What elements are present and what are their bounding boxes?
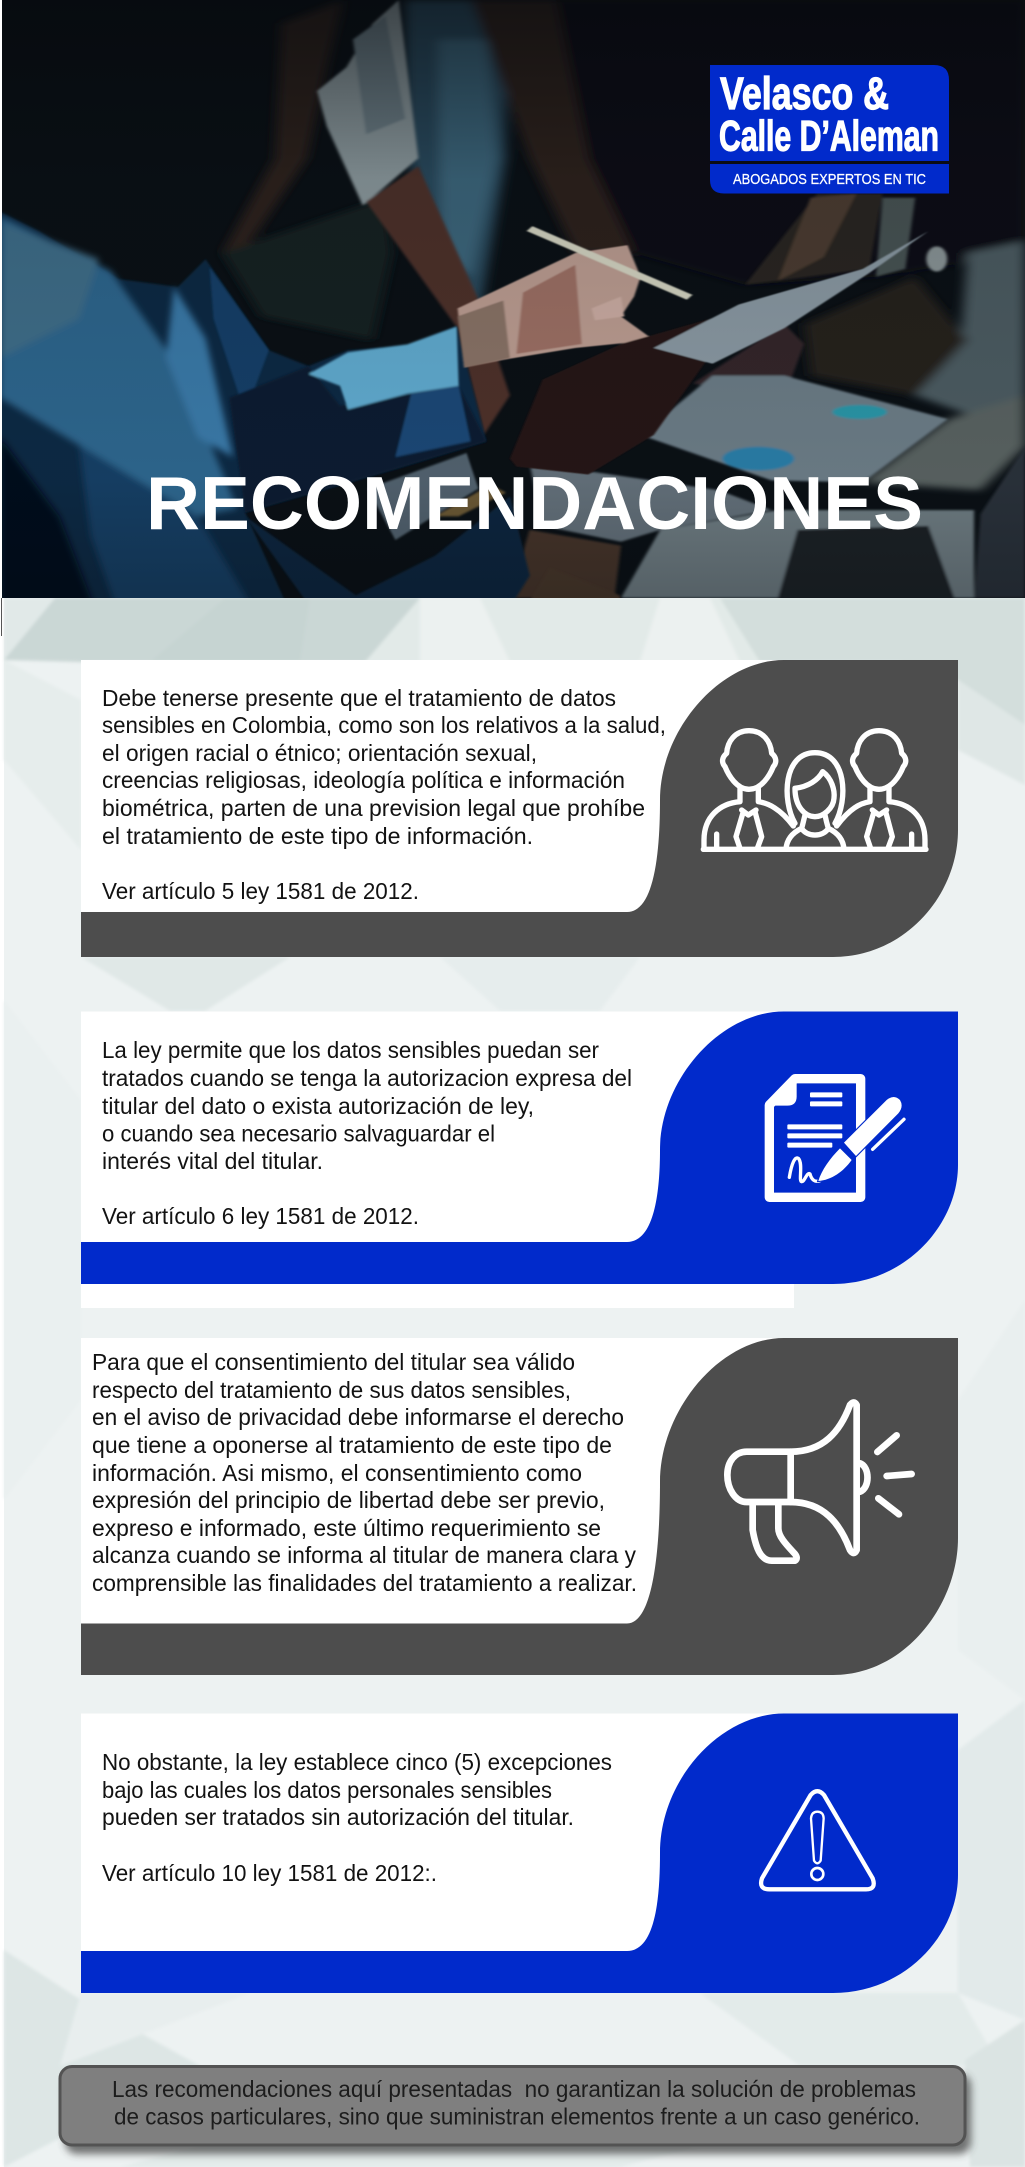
card 3 text: Para que el consentimiento del titular sea válido: [92, 1349, 575, 1375]
card 1 text: [102, 685, 666, 904]
panel: consent card: [81, 1338, 958, 1675]
icon: signed document: [769, 1079, 904, 1197]
card 1 text: creencias religiosas, ideología política e información: [102, 767, 625, 793]
panel: legal authorization card: [81, 1012, 958, 1308]
footer disclaimer: Las recomendaciones aquí presentadas no garantizan la solución de problemas: [112, 2076, 916, 2102]
card 1 text: el tratamiento de este tipo de información.: [102, 823, 533, 849]
card 1 text: biométrica, parten de una prevision legal que prohíbe: [102, 795, 645, 821]
hero: shirt and sleeve: [2, 212, 620, 598]
hero photo: [2, 0, 1025, 598]
card 3 text: información. Asi mismo, el consentimiento como: [92, 1460, 582, 1486]
icon: megaphone: [727, 1402, 912, 1561]
icon: group of people: [703, 731, 926, 849]
icon: warning triangle: [761, 1791, 874, 1889]
card 3 text: expreso e informado, este último requerimiento se: [92, 1515, 601, 1541]
panel: exceptions card: [81, 1714, 958, 1993]
title: RECOMENDACIONES: [146, 461, 923, 545]
card 1 text: Debe tenerse presente que el tratamiento de datos: [102, 685, 616, 711]
card 2 text: Ver artículo 6 ley 1581 de 2012.: [102, 1203, 419, 1229]
card 3 text: que tiene a oponerse al tratamiento de este tipo de: [92, 1432, 612, 1458]
card 3 text: comprensible las finalidades del tratamiento a realizar.: [92, 1570, 637, 1596]
footer disclaimer: [60, 2066, 971, 2154]
logo: Velasco &: [720, 68, 889, 119]
card 4 text: bajo las cuales los datos personales sensibles: [102, 1777, 552, 1803]
card 2 text: La ley permite que los datos sensibles puedan ser: [102, 1037, 599, 1063]
card 4 text: pueden ser tratados sin autorización del titular.: [102, 1804, 574, 1830]
card 3 text: respecto del tratamiento de sus datos sensibles,: [92, 1377, 571, 1403]
panel: sensitive data card: [81, 660, 958, 957]
card 3 text: alcanza cuando se informa al titular de manera clara y: [92, 1542, 636, 1568]
card 2 text: tratados cuando se tenga la autorizacion expresa del: [102, 1065, 632, 1091]
card 3 text: en el aviso de privacidad debe informarse el derecho: [92, 1404, 624, 1430]
logo: Calle D’Aleman: [719, 112, 939, 160]
logo: ABOGADOS EXPERTOS EN TIC: [733, 171, 926, 188]
card 4 text: No obstante, la ley establece cinco (5) excepciones: [102, 1749, 612, 1775]
card 3 text: expresión del principio de libertad debe ser previo,: [92, 1487, 605, 1513]
card 1 text: el origen racial o étnico; orientación sexual,: [102, 740, 537, 766]
card 3 text: [92, 1349, 637, 1596]
card 1 text: Ver artículo 5 ley 1581 de 2012.: [102, 878, 419, 904]
card 2 text: interés vital del titular.: [102, 1148, 323, 1174]
footer disclaimer: de casos particulares, sino que suministran elementos frente a un caso genérico.: [114, 2104, 920, 2130]
logo: [710, 65, 949, 194]
card 2 text: [102, 1037, 632, 1229]
hero: hand, pencil and paper: [458, 229, 928, 474]
card 2 text: o cuando sea necesario salvaguardar el: [102, 1120, 495, 1146]
card 4 text: [102, 1749, 612, 1886]
card 4 text: Ver artículo 10 ley 1581 de 2012:.: [102, 1860, 437, 1886]
card 1 text: sensibles en Colombia, como son los relativos a la salud,: [102, 712, 666, 738]
card 2 text: titular del dato o exista autorización de ley,: [102, 1093, 534, 1119]
